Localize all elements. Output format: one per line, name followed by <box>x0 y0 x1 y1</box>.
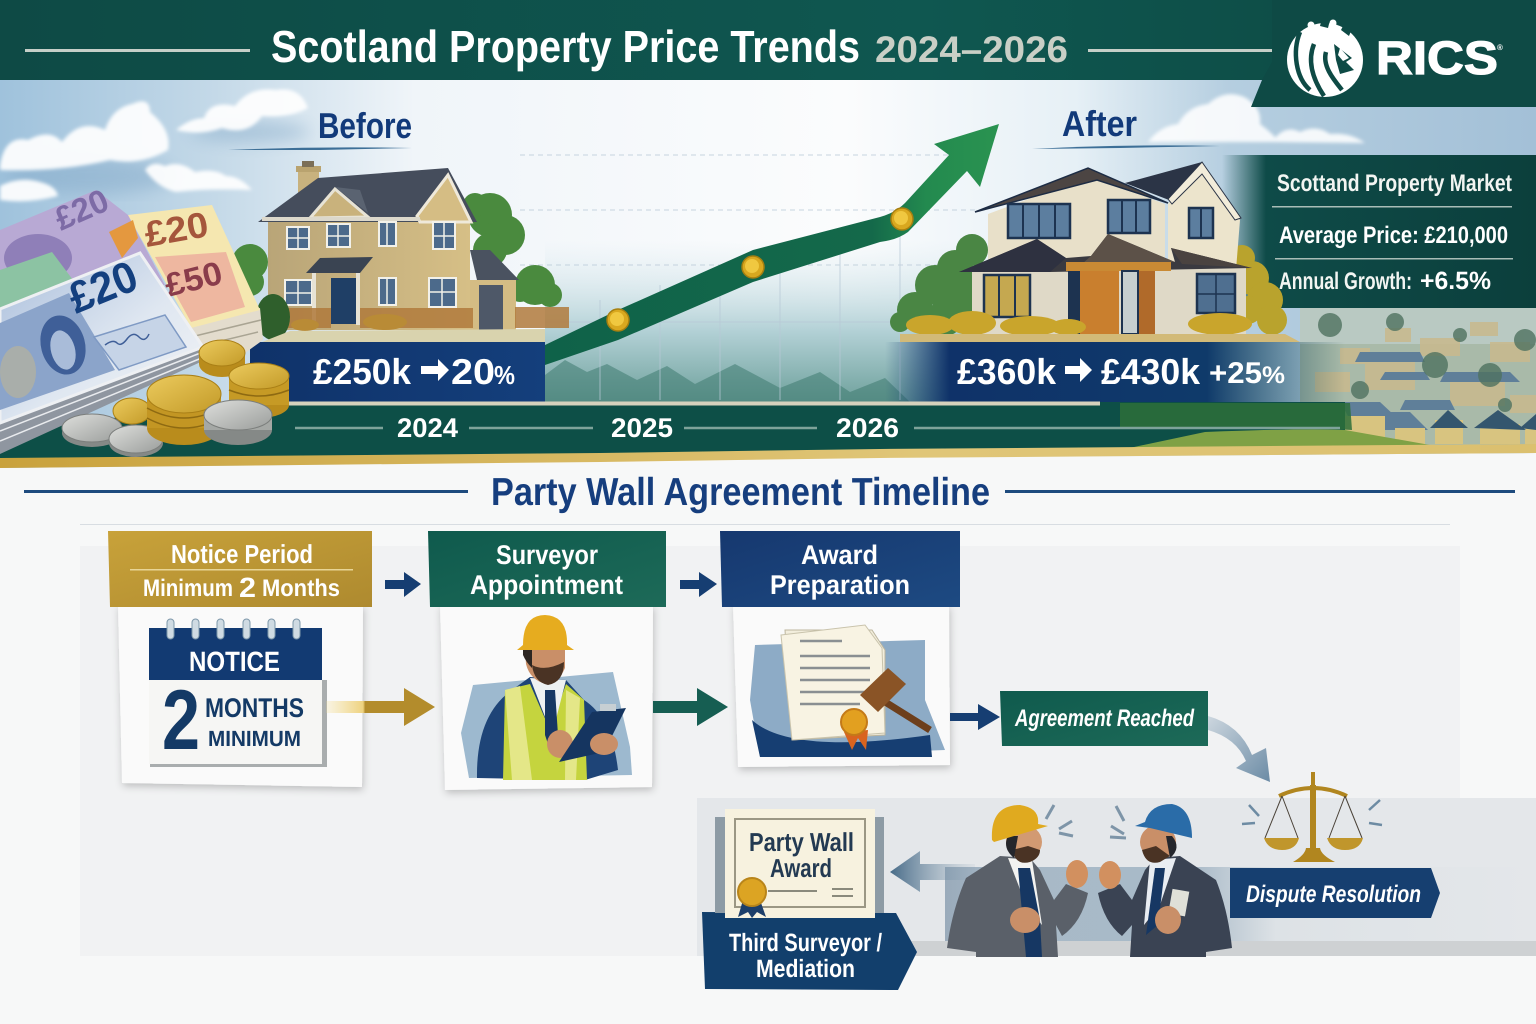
gavel <box>860 668 930 730</box>
growth arrow <box>545 124 999 365</box>
header: Award <box>801 540 878 570</box>
title banner <box>0 0 1536 80</box>
cream note <box>109 203 260 328</box>
after price from: £360k <box>957 351 1057 392</box>
agreement reached box <box>1000 691 1208 746</box>
clouds left <box>0 89 308 201</box>
purple note <box>0 181 165 315</box>
header <box>108 531 372 607</box>
planting <box>906 311 1252 336</box>
walls <box>268 220 470 330</box>
arrow: header notice to surveyor <box>385 572 421 597</box>
vest <box>503 684 587 780</box>
blue note <box>0 252 203 423</box>
chart grid <box>520 155 975 400</box>
blue note: £20 <box>61 252 145 323</box>
timeline heading <box>24 471 1515 514</box>
year axis <box>262 404 1340 443</box>
before price bar <box>250 342 545 402</box>
arrow: surveyor to award <box>653 688 728 726</box>
arrow: award to agreement <box>950 704 1000 730</box>
annual growth: Annual Growth: <box>1279 268 1412 295</box>
head <box>525 648 565 684</box>
marker 2024 <box>607 309 629 331</box>
blue hat <box>1135 804 1192 838</box>
front gable <box>310 189 368 218</box>
lower right window <box>1197 274 1235 313</box>
after house <box>890 162 1300 342</box>
card body <box>440 605 653 790</box>
RICS wordmark: RICS <box>1376 31 1498 84</box>
chimney <box>296 161 321 205</box>
before price bar: % <box>494 360 515 390</box>
main roof <box>258 168 477 222</box>
trees behind <box>232 193 562 307</box>
third surveyor ribbon <box>702 912 917 990</box>
stack under cream note <box>185 308 263 360</box>
market panel <box>1222 155 1536 308</box>
registered mark: ® <box>1497 43 1503 52</box>
third surveyor ribbon: Mediation <box>756 955 855 983</box>
party wall award certificate <box>715 809 884 918</box>
windows <box>285 222 456 307</box>
header: Appointment <box>470 570 623 600</box>
header: Preparation <box>770 570 910 600</box>
fence <box>287 307 569 328</box>
calendar icon <box>149 619 327 768</box>
surveyor right in dispute <box>1098 804 1232 957</box>
cloud shadows <box>5 122 310 194</box>
calendar text: NOTICE <box>189 646 280 677</box>
title years: 2024–2026 <box>875 29 1068 70</box>
header: Surveyor <box>496 540 598 570</box>
grass <box>1120 429 1430 450</box>
upper windows <box>1008 200 1213 238</box>
scales icon <box>1242 772 1382 862</box>
cream note: £20 <box>141 203 211 255</box>
marker 2025 <box>742 256 764 278</box>
cream note: £50 <box>161 254 226 304</box>
shirt and tie <box>530 678 566 735</box>
year 2025: 2025 <box>611 413 673 443</box>
calendar icon: 2 <box>162 673 200 768</box>
holding hand <box>590 733 618 755</box>
lower left window <box>984 275 1030 317</box>
upper walls <box>988 176 1165 270</box>
shrubs <box>256 294 290 340</box>
bundle edges <box>0 347 205 454</box>
area under gold stripe <box>0 453 1536 472</box>
after heading: After <box>1062 103 1137 144</box>
title rule left <box>25 49 250 52</box>
village scene <box>1300 308 1536 448</box>
arrow: dispute to award <box>890 851 975 892</box>
certificate text: Party Wall <box>749 827 854 857</box>
panel: property price hero <box>0 0 1536 472</box>
curved arrow to dispute <box>1208 716 1270 782</box>
surveyor left in dispute <box>947 805 1088 957</box>
hedge <box>1120 403 1352 430</box>
clouds right <box>1148 94 1365 143</box>
timeline backdrop <box>0 472 1536 1024</box>
rosette <box>841 709 868 750</box>
money illustration <box>0 181 289 457</box>
after percent: +25 <box>1209 357 1262 390</box>
header <box>428 531 666 607</box>
dispute resolution ribbon <box>1230 868 1440 918</box>
right gable <box>417 175 471 222</box>
year 2024: 2024 <box>397 413 458 443</box>
garage <box>470 250 519 280</box>
seal <box>738 878 766 918</box>
fist <box>1099 861 1121 889</box>
market panel: +6.5% <box>1420 267 1491 295</box>
chart backdrop haze <box>545 240 975 405</box>
timber entrance <box>1066 262 1171 334</box>
header <box>720 531 960 607</box>
jacket <box>477 677 618 780</box>
header: Minimum <box>143 575 233 602</box>
green note <box>0 252 73 310</box>
step: surveyor appointment <box>428 531 666 790</box>
before house <box>232 161 569 342</box>
party wall award certificate: Award <box>770 853 832 883</box>
step: award preparation <box>720 531 960 767</box>
title rule right <box>1088 49 1272 52</box>
coins <box>62 340 289 457</box>
lower green band <box>0 402 1345 460</box>
agreement reached box: Agreement Reached <box>1014 705 1195 732</box>
distant treeline <box>545 360 910 402</box>
surveyor illustration <box>461 615 632 780</box>
after price bar <box>885 342 1345 402</box>
right gable wall <box>1168 168 1240 270</box>
after price to: £430k <box>1101 351 1201 392</box>
arrow: notice to surveyor <box>326 688 435 726</box>
logo tab <box>1251 0 1536 107</box>
year 2026: 2026 <box>836 413 899 443</box>
calendar icon: MONTHS <box>205 693 304 723</box>
hard hat <box>517 615 574 650</box>
third surveyor ribbon: Third Surveyor / <box>729 929 882 957</box>
header: Notice Period <box>171 539 313 569</box>
after heading <box>1032 103 1220 149</box>
clipboard <box>559 708 626 762</box>
document and gavel illustration <box>750 625 945 757</box>
card body <box>118 605 363 787</box>
arrow: header surveyor to award <box>680 572 717 597</box>
before percent: 20 <box>451 351 495 392</box>
lower roofs <box>959 234 1252 272</box>
header: Months <box>262 575 340 602</box>
fist <box>1066 860 1088 888</box>
timeline heading: Party Wall Agreement Timeline <box>491 471 990 514</box>
after price bar: % <box>1262 362 1285 389</box>
pen hand <box>547 730 573 758</box>
porch and door <box>306 257 373 273</box>
foliage <box>890 234 988 336</box>
step: notice period <box>108 531 372 787</box>
card body <box>733 605 950 767</box>
sky backdrop <box>0 78 1536 468</box>
dispute resolution ribbon: Dispute Resolution <box>1246 881 1421 908</box>
calendar icon: MINIMUM <box>208 726 301 751</box>
marker 2026 <box>891 208 913 230</box>
RICS lion mark <box>1287 18 1363 97</box>
before price arrow <box>421 359 449 381</box>
purple note: £20 <box>49 181 114 237</box>
before price: £250k <box>313 351 412 392</box>
yellow hat <box>992 805 1048 842</box>
before heading: Before <box>318 105 412 146</box>
lower walls <box>972 268 1246 334</box>
header: 2 <box>239 572 256 603</box>
after price arrow <box>1065 358 1092 382</box>
main roof <box>975 168 1168 212</box>
main title: Scotland Property Price Trends <box>271 21 860 72</box>
gold stripe <box>0 444 1536 468</box>
